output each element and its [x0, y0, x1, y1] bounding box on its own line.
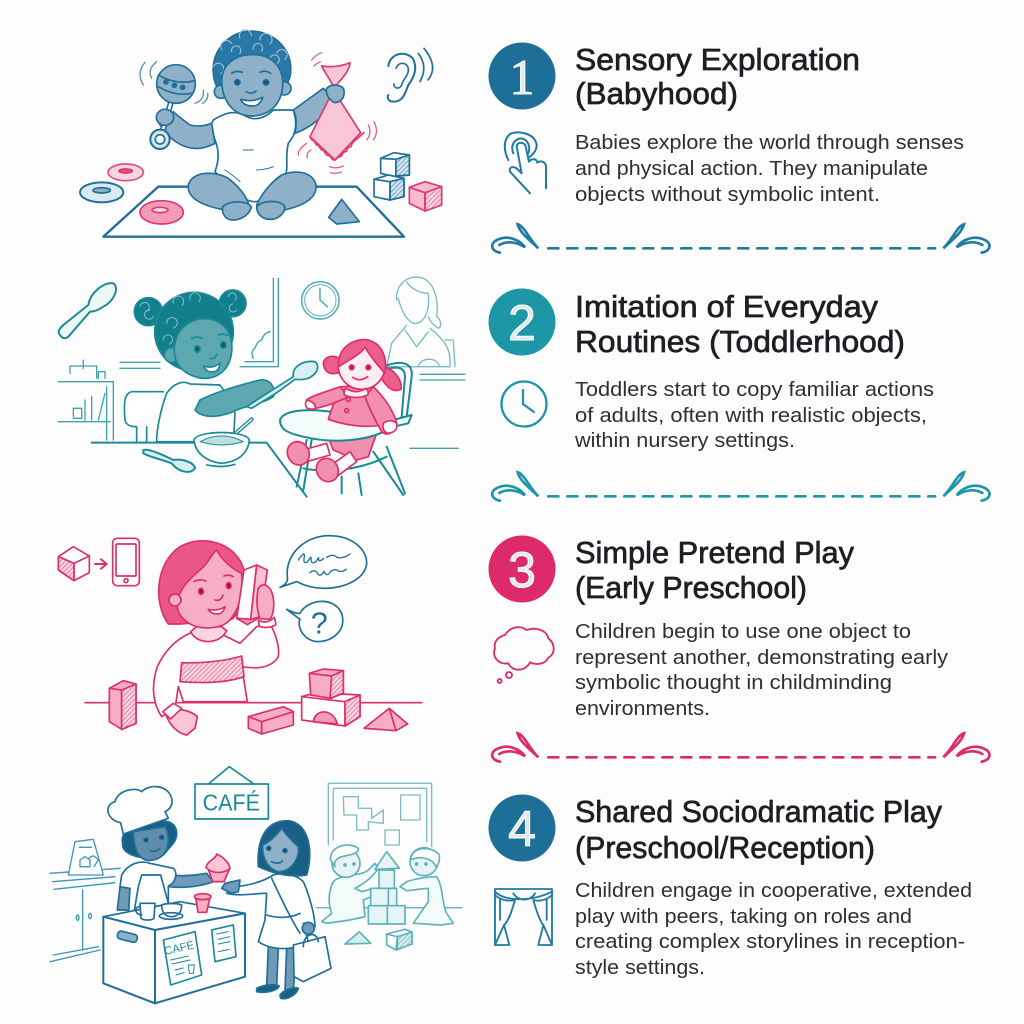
step 1 title: Sensory Exploration: [575, 42, 860, 77]
step 4 description: Children engage in cooperative, extended: [575, 879, 972, 902]
torso: [328, 385, 381, 426]
spoon: [59, 283, 116, 338]
step 4 title: [575, 794, 942, 865]
menu poster: [212, 925, 236, 962]
step 2 description: of adults, often with realistic objects,: [575, 404, 927, 427]
step 3 number badge: 3: [508, 542, 536, 598]
step 1 title: [575, 42, 860, 111]
legs: [188, 173, 248, 212]
step 3 title: (Early Preschool): [575, 570, 807, 605]
step 2 title: [575, 289, 905, 359]
play cafe counter box: [103, 894, 245, 1003]
hair: [159, 541, 245, 624]
child chef: [108, 787, 213, 917]
arms: [158, 112, 215, 148]
ear icon with sound waves: [388, 48, 433, 102]
cafe hanging sign: CAFÉ: [203, 790, 260, 816]
cafe hanging sign: [195, 767, 268, 819]
step 4 number badge: 4: [508, 801, 536, 857]
speech bubble with squiggles: [280, 536, 367, 588]
baby: [158, 30, 335, 220]
step 4 description: style settings.: [575, 956, 705, 979]
step 3 title: Simple Pretend Play: [575, 535, 854, 570]
illustration: children playing cafe and building blocks: [50, 767, 462, 1003]
rattle: [140, 62, 208, 149]
step 4 number badge: [488, 794, 556, 862]
background room: window, shelf: [58, 278, 465, 448]
high chair tray: [280, 410, 412, 441]
doll head: [338, 343, 385, 389]
face: [133, 827, 168, 861]
table spoon: [143, 450, 195, 472]
step 1 description: objects without symbolic intent.: [575, 183, 880, 206]
doll skirt and legs: [283, 433, 377, 486]
block stack: [374, 153, 442, 211]
bowl of food: [194, 419, 252, 467]
hair: [213, 31, 291, 90]
far arm: [117, 887, 133, 910]
step 1 description: and physical action. They manipulate: [575, 157, 928, 180]
tower: [368, 906, 405, 924]
cafe poster: [163, 932, 202, 985]
cafe poster: CAFÉ: [163, 938, 196, 958]
illustration: child pretending block is a phone: [58, 536, 422, 735]
question bubble: ?: [311, 606, 328, 640]
arm: [195, 380, 274, 416]
icon: clock: [502, 382, 546, 426]
triangle block: [329, 199, 359, 224]
pink handkerchief: [298, 53, 377, 173]
hair: [122, 820, 177, 857]
doll pigtails: [323, 356, 342, 374]
icon: thought cloud: [494, 627, 554, 683]
step 2 description: within nursery settings.: [574, 429, 795, 452]
face: [263, 828, 299, 872]
feet: [222, 202, 251, 220]
step 2 number badge: [488, 288, 556, 356]
step 4 description: [575, 879, 972, 979]
adult in background: [387, 277, 455, 367]
hair buns: [134, 298, 162, 326]
right kid: [400, 877, 453, 925]
arms: [306, 387, 348, 408]
background kitchen counter and menu: [50, 839, 120, 962]
step 2 description: Toddlers start to copy familiar actions: [575, 378, 934, 401]
left kid: [322, 863, 378, 923]
play mat: [103, 187, 404, 237]
step 4 description: creating complex storylines in reception-: [575, 930, 965, 953]
illustration: baby sensory exploration: [80, 30, 442, 237]
pin board: [328, 783, 432, 847]
high chair: [297, 363, 412, 495]
lower hand: [165, 710, 197, 735]
step 4 title: Shared Sociodramatic Play: [575, 794, 942, 829]
cups: [140, 903, 155, 920]
ears: [214, 85, 228, 98]
block phone: [237, 565, 257, 619]
hair: [258, 821, 310, 876]
girl customer: [222, 821, 331, 999]
ear: [164, 348, 179, 362]
step 3 description: environments.: [575, 697, 710, 720]
step 3 description: [575, 620, 949, 720]
step 2 title: Imitation of Everyday: [575, 289, 879, 324]
face: [174, 319, 232, 378]
table line: [85, 700, 422, 705]
step 1 title: (Babyhood): [575, 76, 738, 111]
hand holding block: [257, 585, 274, 619]
wooden blocks: [109, 669, 408, 734]
step 1 number badge: [488, 42, 556, 110]
coat and skirt: [227, 874, 315, 949]
kids building block tower: [317, 845, 462, 950]
chef hat: [108, 787, 172, 834]
step 3 description: Children begin to use one object to: [575, 620, 911, 643]
step 2 number badge: 2: [508, 295, 536, 351]
icon: touch hand: [505, 132, 546, 193]
pink cupcake: [206, 854, 230, 882]
step 2 description: [574, 378, 934, 452]
icon: theatre curtains: [495, 889, 552, 945]
stacking rings: [80, 164, 183, 224]
illustration: toddler feeding doll: [58, 277, 465, 497]
step 3 description: symbolic thought in childminding: [575, 671, 892, 694]
step 1 number badge: 1: [510, 49, 534, 105]
question bubble: [287, 601, 343, 642]
torso and apron: [120, 862, 176, 917]
face: [222, 55, 283, 116]
table edge: [92, 443, 307, 497]
step 3 title: [575, 535, 854, 605]
toddler girl: [134, 290, 274, 442]
arm reaching: [168, 873, 213, 887]
legs: [267, 947, 297, 990]
shopping bag: [293, 937, 331, 982]
sweater: [154, 623, 279, 717]
body and top: [157, 382, 235, 442]
spoon with food: [247, 361, 318, 408]
chair: [124, 392, 163, 442]
step 3 number badge: [488, 536, 556, 602]
step 1 description: Babies explore the world through senses: [575, 131, 964, 154]
rag doll upper body: [305, 340, 401, 434]
step 4 description: play with peers, taking on roles and: [575, 905, 912, 928]
wall clock: [302, 282, 339, 319]
step 4 title: (Preschool/Reception): [575, 830, 875, 865]
object substitution icon: cube to phone: [58, 538, 139, 586]
step 1 description: [575, 131, 964, 206]
step 2 title: Routines (Toddlerhood): [575, 324, 905, 359]
face: [177, 550, 242, 628]
step 3 description: represent another, demonstrating early: [575, 646, 949, 669]
pretend-play child: [154, 541, 279, 735]
onesie: [210, 110, 296, 202]
